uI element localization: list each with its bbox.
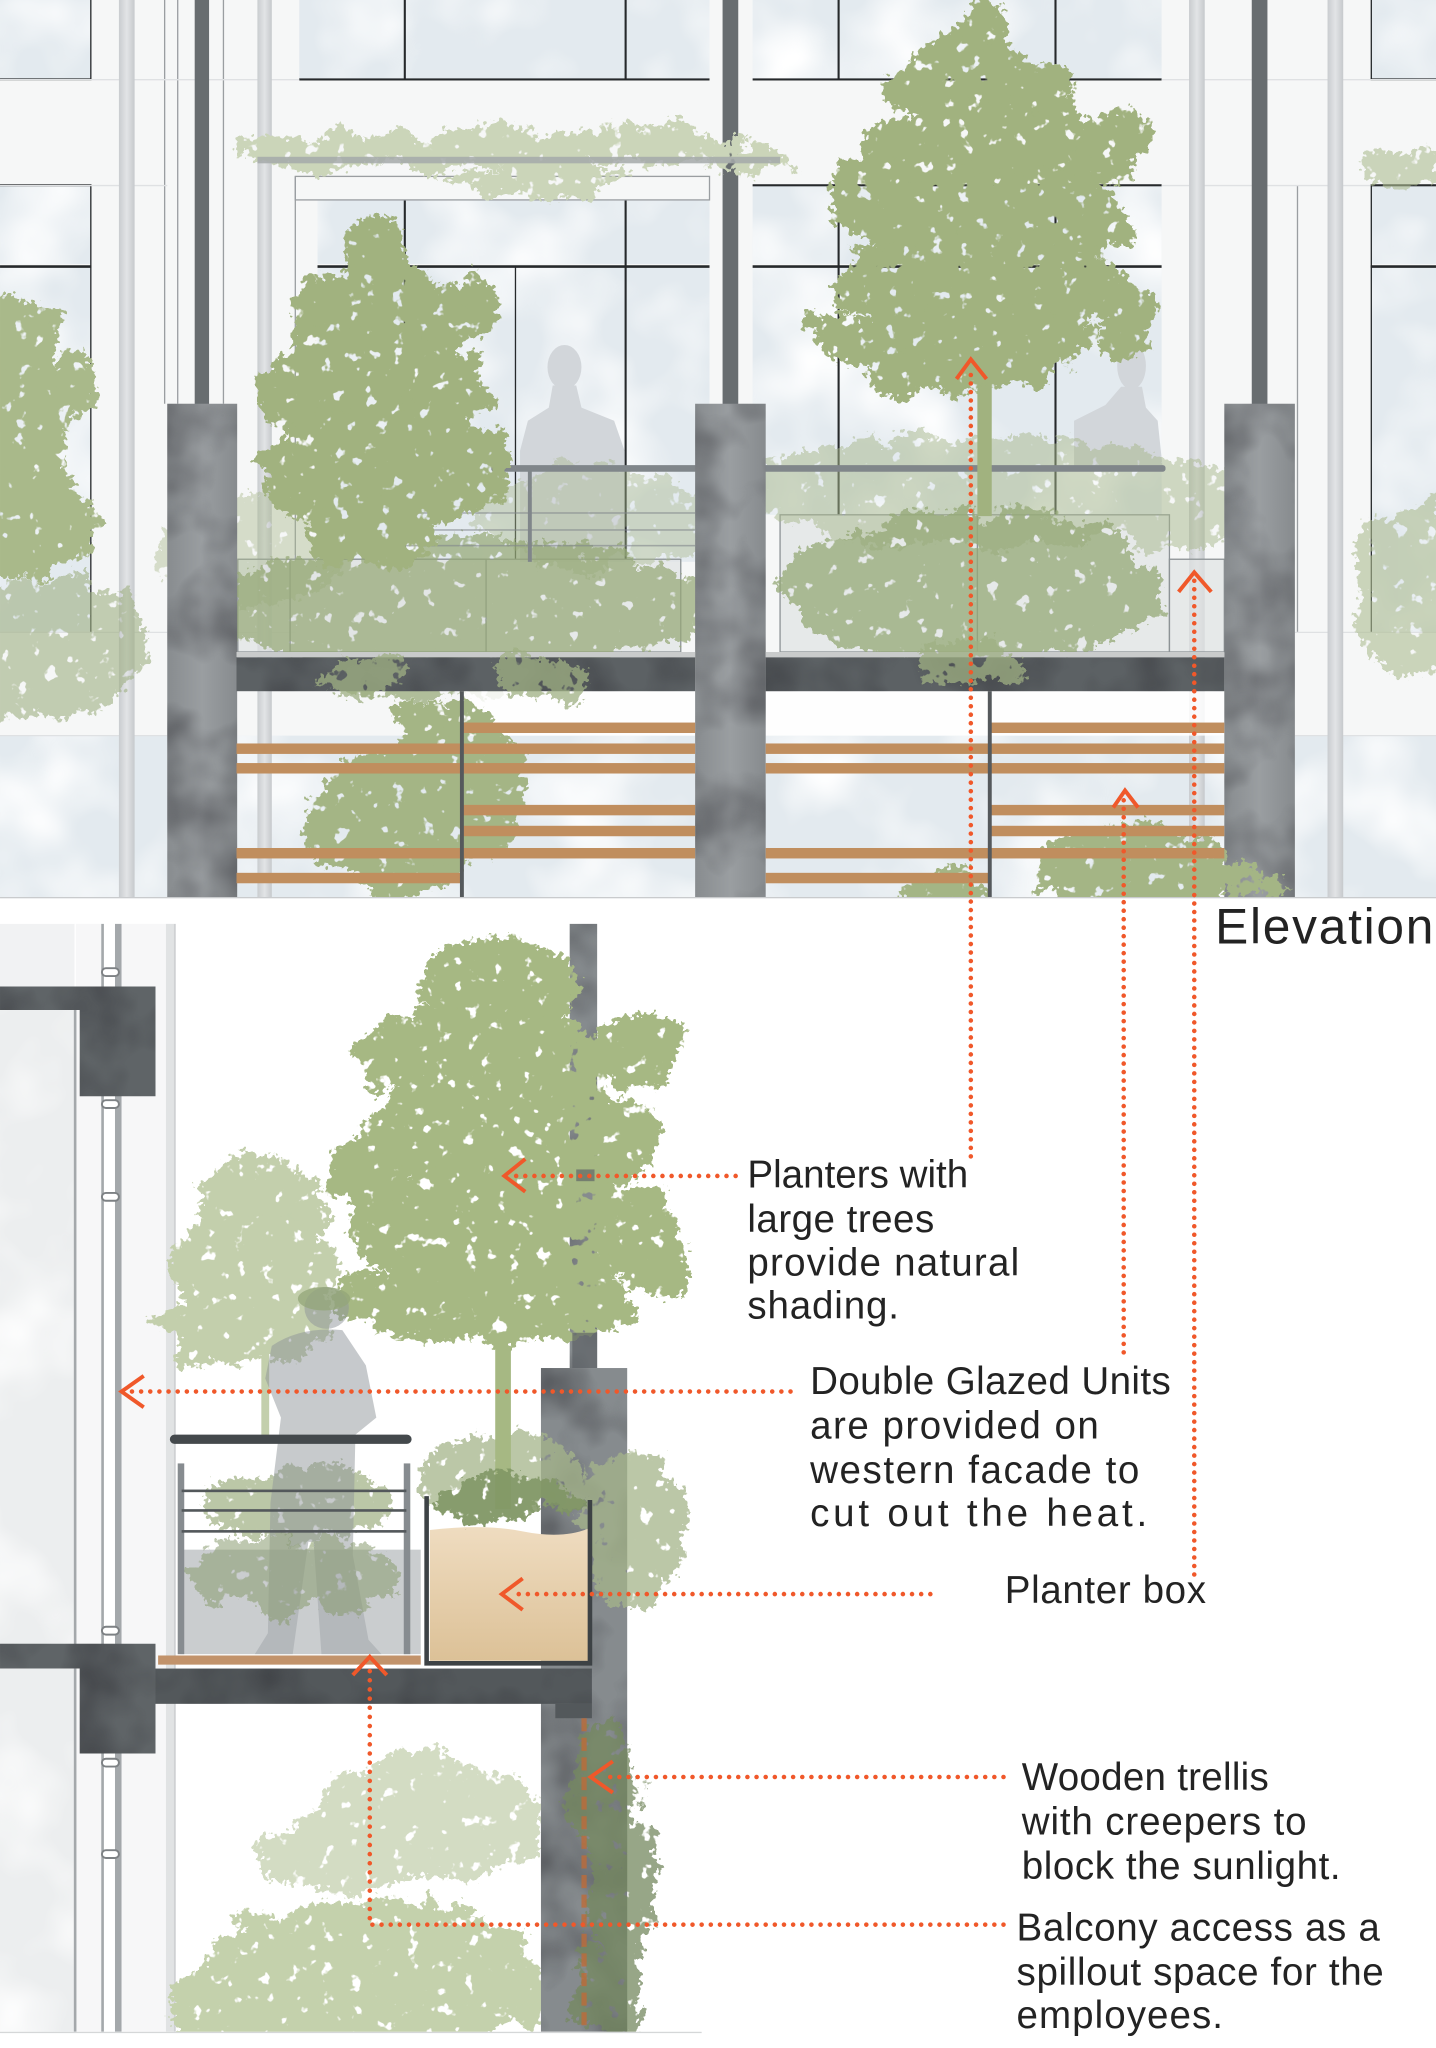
person silhouette	[255, 1287, 382, 1654]
callout leader: balcony access	[353, 1657, 1003, 1925]
arrow: section planter	[502, 1578, 523, 1610]
text: wooden trellis: with creepers to	[1021, 1800, 1307, 1843]
planter glass	[238, 515, 1224, 652]
horizontal leader to trellis	[601, 1775, 1003, 1779]
climbers behind trellis	[310, 693, 1277, 916]
trellis timber	[582, 1718, 586, 2032]
window mullions	[0, 0, 1436, 632]
section column	[541, 1368, 627, 2032]
planter walls	[427, 1496, 590, 1663]
mullion brackets	[102, 968, 119, 1858]
callout leader: double glazed units	[122, 791, 1138, 1407]
balcony rail	[405, 465, 1166, 562]
horizontal leader to section tree	[512, 1174, 736, 1178]
section top border	[0, 922, 702, 924]
text: wooden trellis: block the sunlight.	[1022, 1845, 1341, 1888]
trellis creeper on column	[571, 1722, 657, 2042]
text: planters with large trees: shading.	[747, 1284, 899, 1327]
section bottom border	[0, 2032, 702, 2033]
facade cavity	[76, 924, 174, 2032]
canopy frame	[0, 0, 1436, 736]
callout leader: wooden trellis	[591, 1761, 1003, 1793]
text: planters with large trees: Planters with	[747, 1154, 968, 1197]
foliage in glass	[189, 1538, 399, 1611]
upper dark mullions	[195, 0, 1267, 405]
text: double glazed units: Double Glazed Units	[810, 1360, 1171, 1403]
tree: left planter tree	[257, 218, 512, 570]
panel: section drawing	[0, 922, 702, 2048]
elbow leader to balcony	[370, 1665, 1003, 1925]
upper column	[570, 924, 597, 1368]
left edge tree	[0, 294, 95, 575]
wooden deck	[158, 1655, 421, 1665]
lower bush in bay 1	[209, 542, 706, 693]
text: balcony access: Balcony access as a	[1017, 1906, 1380, 1949]
panel: elevation drawing	[0, 0, 1436, 916]
floor slab	[237, 657, 1224, 691]
window glazing	[0, 0, 1436, 898]
slab top edge	[237, 652, 1224, 657]
dark column peek through tree	[572, 1169, 597, 1368]
text: balcony access: spillout space for the	[1017, 1951, 1384, 1994]
text: wooden trellis	[1021, 1756, 1341, 1888]
arrow: elevation tree	[956, 359, 987, 379]
horizontal leader to section glazing	[131, 1390, 791, 1393]
interior wall upper	[0, 924, 74, 986]
text: planter box: Planter box	[1005, 1569, 1206, 1612]
upper floor beam	[0, 986, 155, 1096]
horizontal leader to section planter	[510, 1592, 930, 1596]
arrow: elevation planter	[1179, 572, 1211, 592]
lower bush in bay 2	[784, 512, 1163, 691]
callout leader: planter box	[502, 572, 1211, 1610]
right edge bushes	[1351, 148, 1436, 673]
trellis posts	[460, 691, 992, 898]
text: planters with large trees: provide natural	[747, 1241, 1019, 1284]
vertical leader to elevation tree	[969, 368, 973, 1156]
wooden trellis bars	[237, 723, 1224, 883]
arrow: section tree	[504, 1159, 525, 1192]
back tree	[159, 1154, 341, 1365]
text: planters with large trees	[747, 1154, 1019, 1327]
text: double glazed units	[809, 1360, 1171, 1535]
interior glass	[0, 1010, 74, 2032]
slab bracket	[555, 1704, 592, 1718]
tree: right planter tree	[813, 0, 1156, 395]
text: balcony access	[1017, 1906, 1384, 2037]
foliage over person head	[298, 1287, 350, 1311]
text: balcony access: employees.	[1017, 1994, 1223, 2037]
arrow: trellis	[591, 1761, 613, 1793]
section facade lines	[74, 924, 176, 2032]
planter shrub	[436, 1479, 588, 1521]
arrow: section glazing	[122, 1376, 144, 1407]
vertical leader to elevation glazing	[1122, 797, 1125, 1352]
callout leader: planters with large trees	[504, 359, 987, 1192]
facade wall background	[0, 0, 1436, 736]
planter soil	[430, 1527, 588, 1661]
balcony slab	[155, 1669, 592, 1704]
bush behind planter	[203, 1432, 683, 1610]
creeper on canopy	[242, 125, 793, 196]
section main tree	[324, 937, 695, 1342]
vertical facade strips	[119, 0, 1343, 898]
railing	[170, 1435, 412, 1654]
lower tree: pale back	[255, 1751, 549, 1887]
silhouette: person in bay 1	[520, 345, 625, 562]
left edge bush	[0, 575, 146, 719]
section tree trunk	[495, 1346, 511, 1509]
lower floor beam	[0, 1644, 155, 1753]
concrete columns	[167, 404, 1295, 898]
text: double glazed units: cut out the heat.	[810, 1492, 1147, 1535]
text: planters with large trees: large trees	[747, 1198, 934, 1241]
lower white opening	[461, 691, 1224, 736]
text: double glazed units: western facade to	[809, 1449, 1139, 1492]
upper bush in bay 2	[738, 435, 1261, 547]
slab-hanging foliage	[329, 643, 1026, 700]
arrow: elevation glazing	[1113, 791, 1138, 807]
text: double glazed units: are provided on	[810, 1405, 1099, 1448]
silhouette: person in bay 2	[1074, 350, 1162, 465]
vertical leader to elevation planter	[1193, 580, 1196, 1574]
elevation bottom border	[0, 897, 1436, 898]
tree: right planter tree trunk	[977, 366, 992, 516]
balcony glass balustrade	[180, 1550, 421, 1654]
canopy bar	[257, 157, 780, 163]
back tree trunk	[261, 1352, 269, 1437]
upper bush in bay 1	[157, 466, 712, 604]
arrow: balcony	[353, 1657, 387, 1675]
lower tree: front	[170, 1901, 549, 2048]
text: wooden trellis: Wooden trellis	[1022, 1756, 1269, 1799]
heading: Elevation: Elevation	[1215, 898, 1433, 954]
